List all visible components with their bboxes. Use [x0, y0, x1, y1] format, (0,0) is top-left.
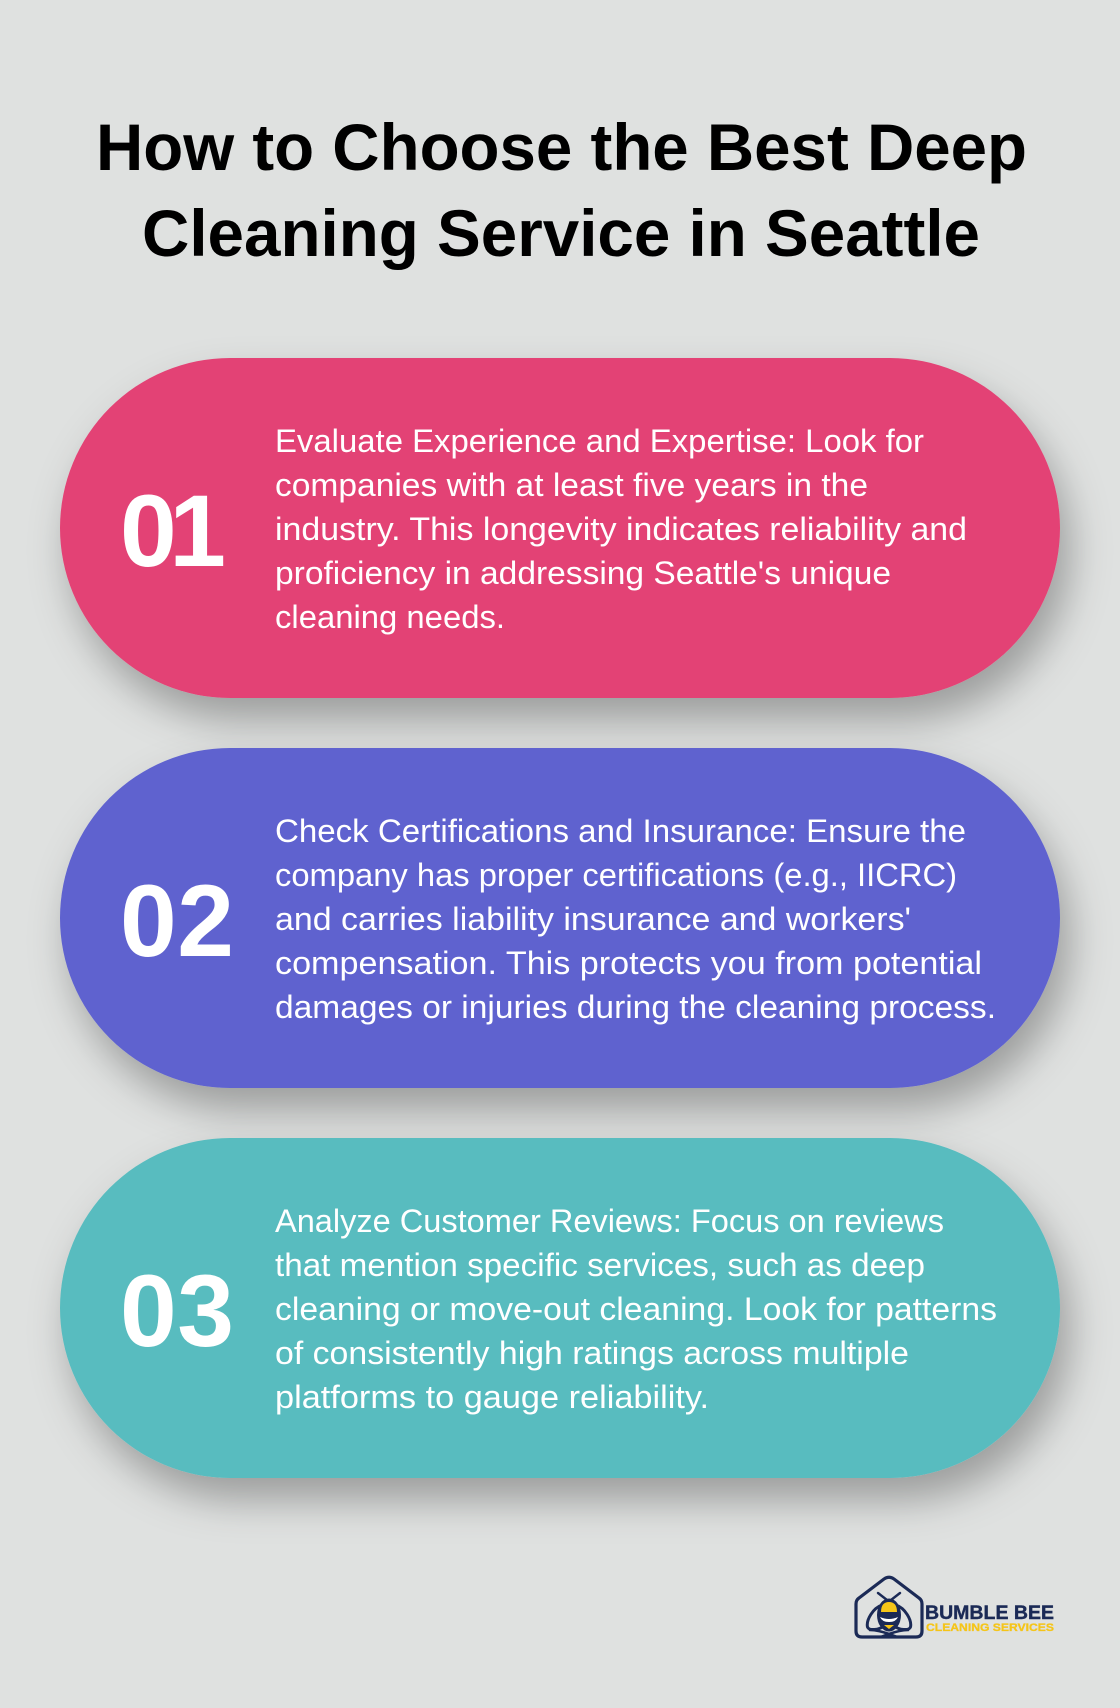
step 03 text: that mention specific services, such as deep: [275, 1247, 925, 1283]
logo wordmark: BUMBLE BEE: [925, 1602, 1054, 1624]
step 03 text: cleaning or move-out cleaning. Look for patterns: [275, 1291, 997, 1327]
step 03 text: [275, 1203, 997, 1415]
step 02 text: company has proper certifications (e.g., IICRC): [275, 857, 957, 893]
logo: Bumble Bee Cleaning Services: [856, 1577, 1054, 1637]
number 02: 02: [120, 864, 234, 978]
pill background teal: [60, 1138, 1060, 1478]
step 03 text: of consistently high ratings across multiple: [275, 1335, 909, 1371]
panel: step 01 experience: [60, 358, 1060, 698]
step 01 text: cleaning needs.: [275, 599, 505, 635]
step 01 text: industry. This longevity indicates reliability and: [275, 511, 967, 547]
step 01 text: companies with at least five years in the: [275, 467, 868, 503]
step 02 text: compensation. This protects you from potential: [275, 945, 982, 981]
panel: step 02 certifications: [60, 748, 1060, 1088]
step 02 text: and carries liability insurance and workers': [275, 901, 911, 937]
logo tagline: CLEANING SERVICES: [926, 1622, 1054, 1634]
icon: house with bee: [856, 1577, 922, 1637]
panel: step 03 reviews: [60, 1138, 1060, 1478]
step 02 text: [275, 813, 996, 1025]
step 02 text: Check Certifications and Insurance: Ensure the: [275, 813, 966, 849]
step 01 text: [275, 423, 967, 635]
title: How to Choose the Best Deep: [96, 110, 1027, 184]
step 01 text: Evaluate Experience and Expertise: Look for: [275, 423, 924, 459]
step 03 text: Analyze Customer Reviews: Focus on reviews: [275, 1203, 944, 1239]
step 03 text: platforms to gauge reliability.: [275, 1379, 709, 1415]
pill background purple: [60, 748, 1060, 1088]
step 01 text: proficiency in addressing Seattle's unique: [275, 555, 891, 591]
step 02 text: damages or injuries during the cleaning process.: [275, 989, 996, 1025]
number 01: 01: [120, 474, 226, 588]
title: [96, 110, 1027, 270]
number 03: 03: [120, 1254, 234, 1368]
title: Cleaning Service in Seattle: [142, 196, 980, 270]
pill background pink: [60, 358, 1060, 698]
